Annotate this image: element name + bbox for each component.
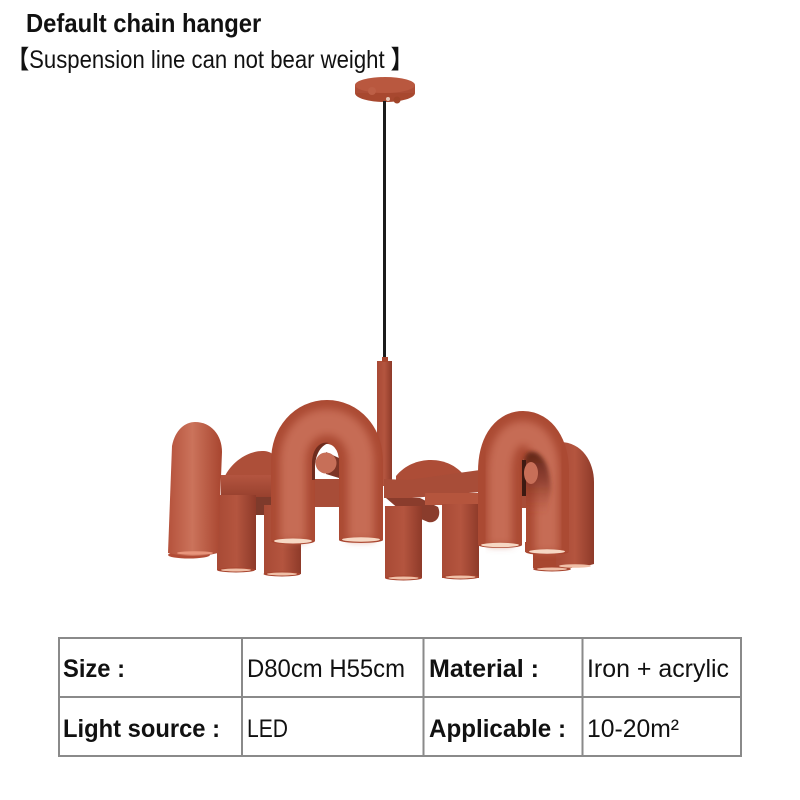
tall left tube [168,422,222,558]
row: size and material: Iron + acrylic [587,655,729,683]
note: suspension line warning: 【Suspension line can not bear weight 】 [7,46,413,74]
front arch right [478,433,568,555]
rear arch right [556,442,594,568]
row: size and material: Material : [429,655,539,683]
round cap right [524,462,538,484]
front arch left [271,422,383,544]
horizontal arm middle-left [310,479,376,507]
row: light source and applicable: 10-20m² [587,715,679,743]
row: light source and applicable: Light source : [63,715,220,743]
row: size and material [63,655,729,683]
arm through left arch [315,479,339,507]
row: light source and applicable [63,715,679,743]
small rear tube right [533,540,572,572]
lower arm right [425,493,481,505]
tube center left [385,506,422,580]
horizontal arm right [384,470,480,498]
suspension cord [383,101,386,359]
row: light source and applicable: LED [247,715,288,743]
ceiling canopy [355,77,415,104]
central stem [377,357,392,486]
tube lower left [217,495,256,572]
table grid [59,638,741,756]
rear half-disc right [396,460,463,490]
row: size and material: Size : [63,655,125,683]
tube center right [442,504,479,580]
back tube small left [264,505,301,576]
rear half-disc left [224,451,274,478]
row: light source and applicable: Applicable : [429,715,566,743]
diagonal arm right [386,498,439,522]
heading: default chain hanger: Default chain hanger [26,8,261,38]
row: size and material: D80cm H55cm [247,655,405,683]
horizontal arm left [221,475,281,497]
round cap left [316,452,339,478]
cross arm under [256,497,286,515]
